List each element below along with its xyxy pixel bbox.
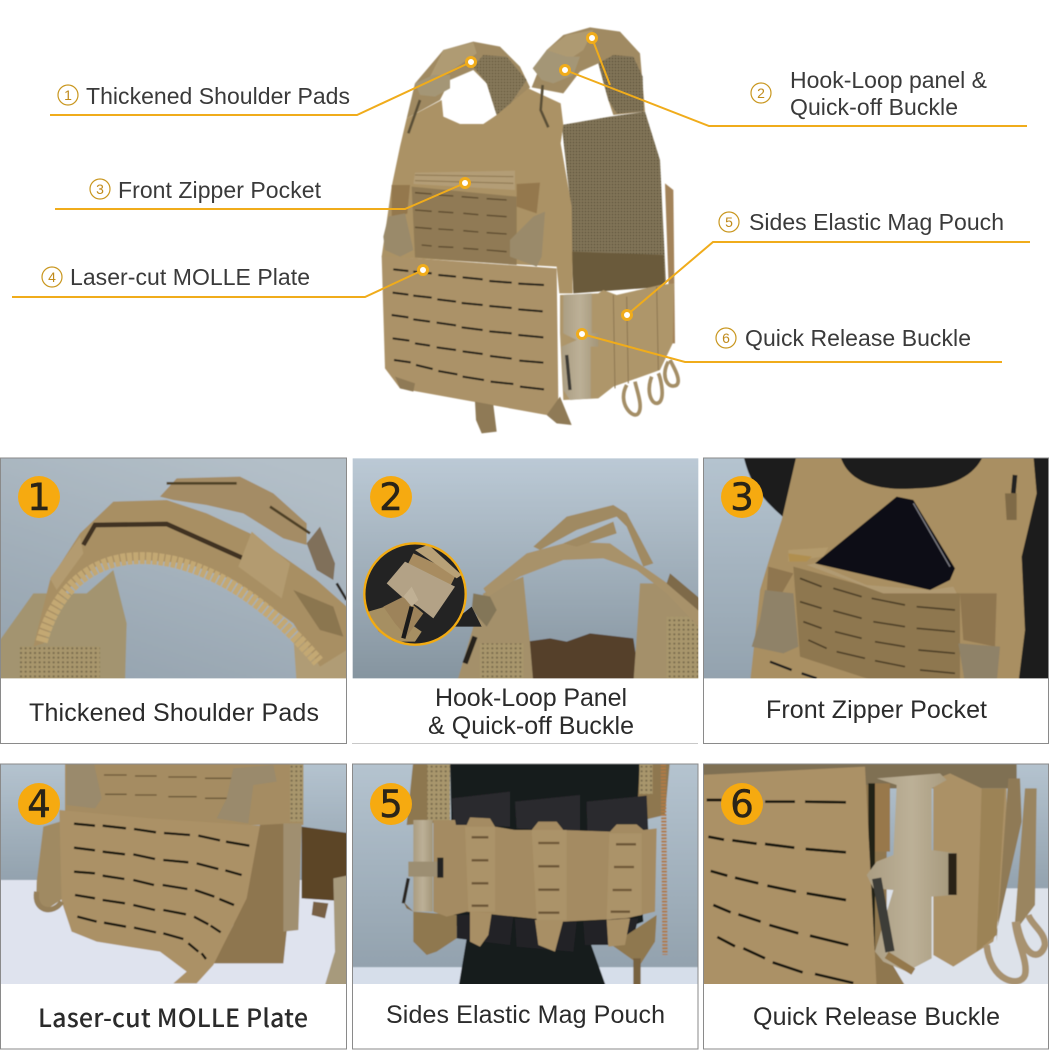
shoulder buckles xyxy=(415,50,580,97)
caption 3: Front Zipper Pocket xyxy=(766,696,987,724)
panel 2: hook-loop panel and quick-off buckle xyxy=(350,455,702,744)
top label 5: 5 xyxy=(725,214,733,230)
badge 4: 4 xyxy=(27,783,51,826)
cords xyxy=(408,85,548,133)
caption 6: Quick Release Buckle xyxy=(753,1003,1000,1031)
back right shoulder strap xyxy=(532,27,645,115)
photo: quick release buckle xyxy=(700,761,1050,988)
photo: shoulder pads xyxy=(0,455,350,683)
caption 2: Hook-Loop Panel xyxy=(435,684,627,712)
caption 4 box xyxy=(0,764,346,1049)
badge 2 xyxy=(370,476,412,519)
lower laser-cut plate xyxy=(382,256,558,415)
quick release buckle xyxy=(562,293,598,400)
top label 4: 4 xyxy=(48,269,56,285)
side elastic mag pouch xyxy=(560,283,674,400)
panel 5: sides elastic mag pouch xyxy=(349,761,702,1049)
badge 3: 3 xyxy=(730,476,754,519)
badge 6: 6 xyxy=(730,783,754,826)
callout line 2 xyxy=(565,38,1027,126)
callout line 3 xyxy=(55,183,465,209)
badge 4 xyxy=(18,783,60,826)
callout lines xyxy=(12,38,1030,362)
callout line 1 xyxy=(50,62,471,115)
badge 5 xyxy=(370,783,412,826)
top label 6: Quick Release Buckle xyxy=(745,325,971,351)
panel 3: front zipper pocket xyxy=(700,455,1050,744)
badge 1: 1 xyxy=(27,476,51,519)
photo: hook-loop panel xyxy=(350,455,702,683)
top label 2 xyxy=(751,67,987,120)
caption 1: Thickened Shoulder Pads xyxy=(29,699,319,727)
main vest product photo xyxy=(382,27,678,433)
badge 6 xyxy=(721,783,763,826)
badge 1 xyxy=(18,476,60,519)
caption 2: & Quick-off Buckle xyxy=(428,712,634,740)
inset zoom circle xyxy=(364,543,482,645)
caption 5 box xyxy=(352,764,698,1049)
panel 1: thickened shoulder pads xyxy=(0,455,350,744)
badge 5: 5 xyxy=(379,783,403,826)
caption 2 rule xyxy=(352,742,698,744)
top label 1: Thickened Shoulder Pads xyxy=(86,83,350,109)
caption 2 xyxy=(428,684,634,740)
caption 5: Sides Elastic Mag Pouch xyxy=(386,1001,665,1029)
top label 2: 2 xyxy=(757,85,765,101)
top label 5: Sides Elastic Mag Pouch xyxy=(749,209,1004,235)
panel 4: laser-cut MOLLE plate xyxy=(0,761,350,1049)
photo: mag pouch xyxy=(349,761,702,988)
callout line 5 xyxy=(627,242,1030,315)
photo: zipper pocket with phone xyxy=(700,455,1050,683)
elastic loops xyxy=(624,360,678,415)
top label 2: Hook-Loop panel & xyxy=(790,67,987,93)
callout line 4 xyxy=(12,270,423,297)
top label 3: 3 xyxy=(96,181,104,197)
caption 4: Laser-cut MOLLE Plate xyxy=(38,999,308,1035)
bottom tabs xyxy=(395,377,572,433)
badge 3 xyxy=(721,476,763,519)
caption 6 box xyxy=(704,764,1048,1049)
top label 6: 6 xyxy=(722,330,730,346)
caption 3 box xyxy=(704,458,1048,744)
top label 4: Laser-cut MOLLE Plate xyxy=(70,264,310,290)
straps and side-release buckles xyxy=(392,183,540,220)
top label 3: Front Zipper Pocket xyxy=(118,177,322,203)
back mesh panel xyxy=(562,112,666,290)
caption 1 box xyxy=(0,458,346,744)
left shoulder strap xyxy=(407,42,530,118)
zipper strip xyxy=(413,171,515,190)
top label 2: Quick-off Buckle xyxy=(790,94,958,120)
photo: MOLLE plate xyxy=(0,761,350,988)
front panel xyxy=(382,88,573,293)
panel 6: quick release buckle xyxy=(700,761,1050,1049)
callout dots xyxy=(418,34,632,338)
callout line 6 xyxy=(582,334,1002,362)
MOLLE mini panel xyxy=(412,187,517,265)
top label 1: 1 xyxy=(64,87,72,103)
badge 2: 2 xyxy=(379,476,403,519)
